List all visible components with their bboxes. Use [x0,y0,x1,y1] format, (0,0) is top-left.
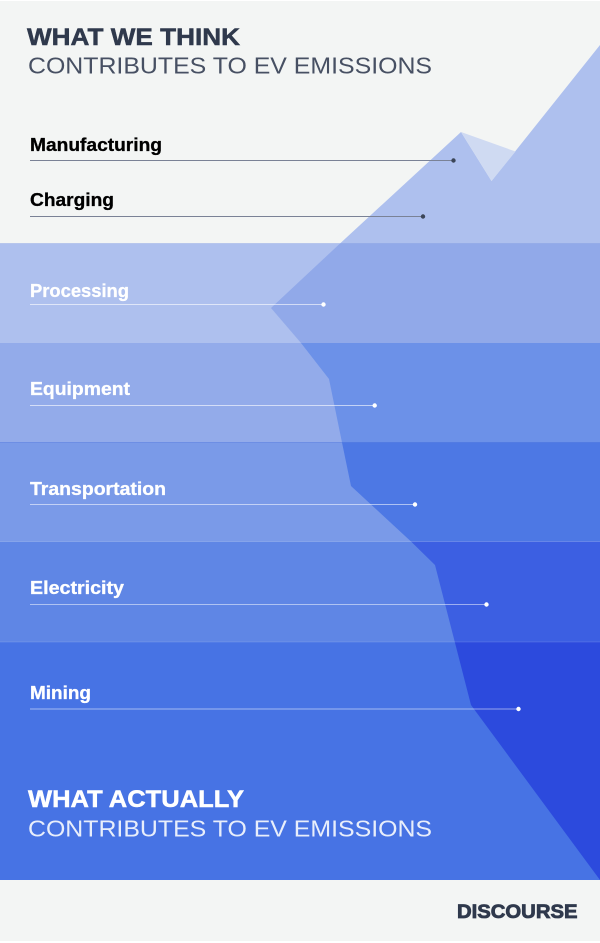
label: Charging: Charging [30,190,114,210]
label: Mining: Mining [30,683,91,703]
label: Charging [30,190,425,219]
label: Electricity: Electricity [30,578,124,598]
title: what we think: CONTRIBUTES TO EV EMISSIONS [28,52,432,78]
title: what actually [28,786,432,842]
logo: Discourse: DISCOURSE [457,901,578,923]
label: Processing [30,281,326,307]
label: Transportation [30,479,417,507]
label: Manufacturing: Manufacturing [30,135,162,155]
title: what actually: CONTRIBUTES TO EV EMISSIONS [28,816,432,842]
panel: layered bands [0,244,600,880]
title: what we think: WHAT WE THINK [27,24,241,51]
label: Equipment [30,379,377,408]
label: Equipment: Equipment [30,379,130,399]
label: Processing: Processing [30,281,129,301]
label: Transportation: Transportation [30,479,166,499]
title: what we think [27,24,432,78]
title: what actually: WHAT ACTUALLY [28,786,244,813]
label: Manufacturing [30,135,456,163]
label: Electricity [30,578,489,607]
label: Mining [30,683,521,711]
